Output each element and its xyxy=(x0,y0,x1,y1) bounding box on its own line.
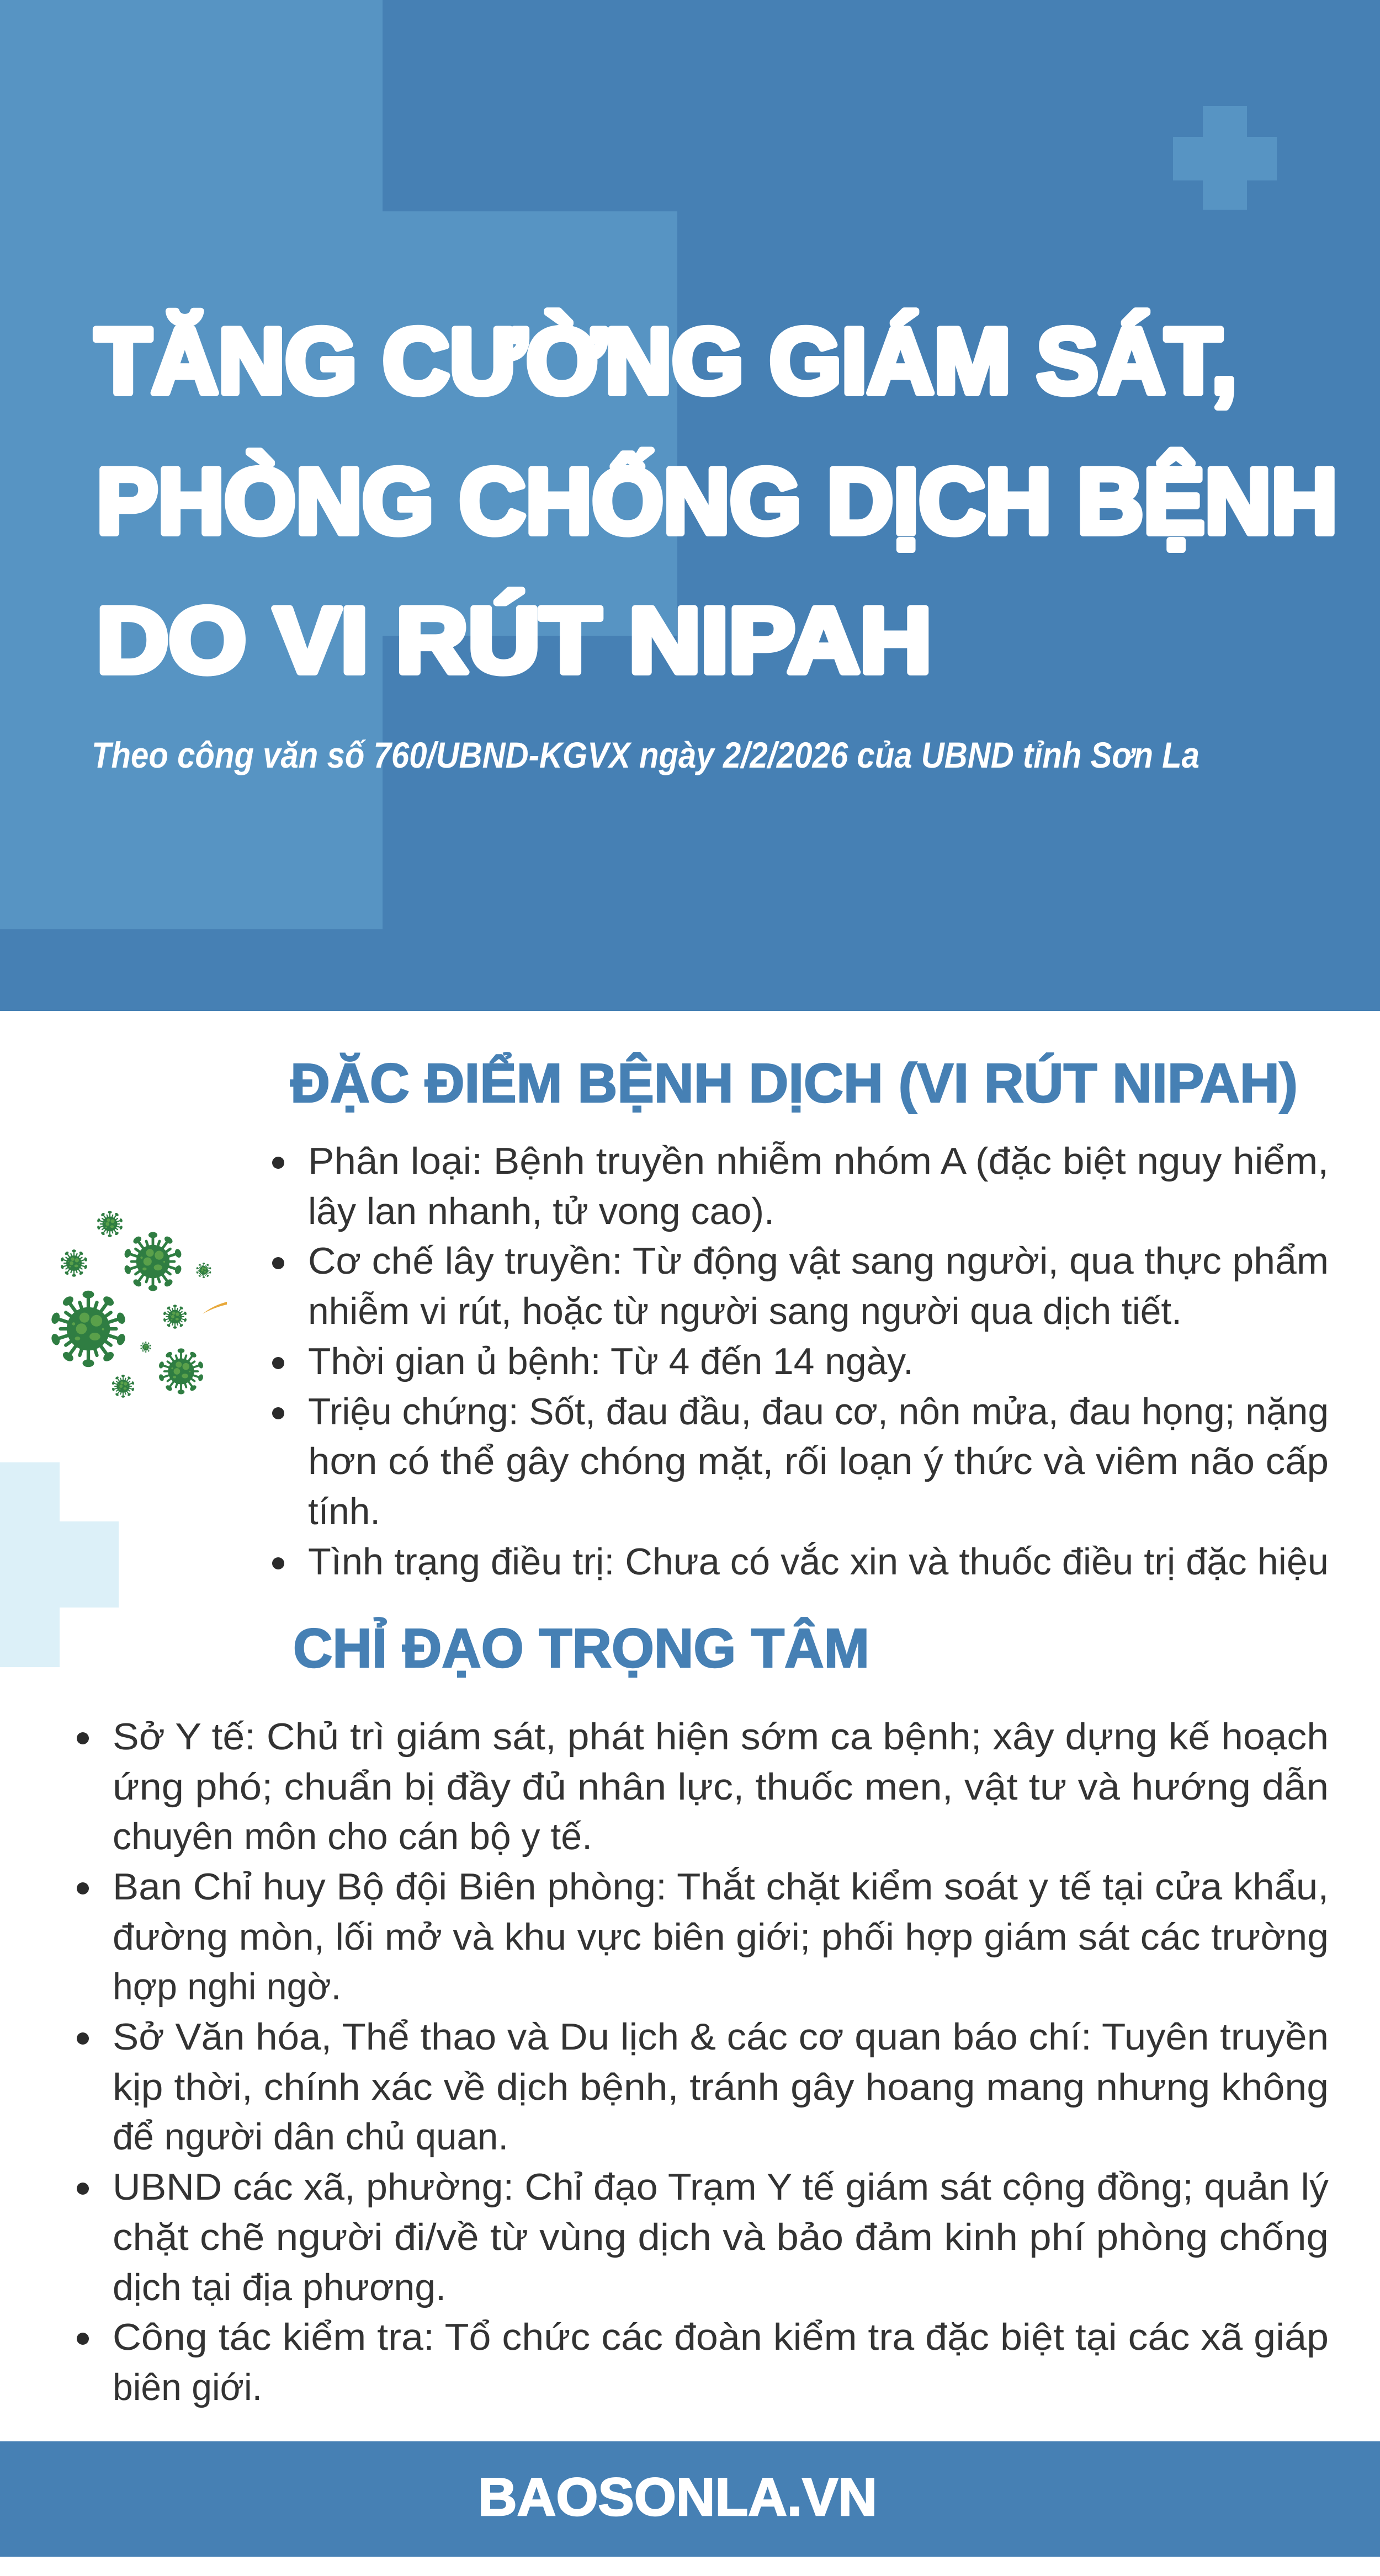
bullet list: key directions: dịch tại địa phương. xyxy=(113,2266,446,2308)
large background cross xyxy=(0,0,677,929)
panel: disease characteristics xyxy=(272,1052,1329,1583)
bullet list: disease characteristics: Phân loại: Bệnh truyền nhiễm nhóm A (đặc biệt nguy hiểm, xyxy=(308,1140,1329,1182)
bullet list: key directions: chuyên môn cho cán bộ y tế. xyxy=(113,1816,592,1858)
bullet list: key directions xyxy=(77,1716,1329,2408)
title: TĂNG CƯỜNG GIÁM SÁT, xyxy=(95,309,1237,413)
icon: virus cluster xyxy=(49,1211,227,1398)
bullet list: key directions: chặt chẽ người đi/về từ vùng dịch và bảo đảm kinh phí phòng chống xyxy=(113,2216,1329,2258)
bullet list: key directions: để người dân chủ quan. xyxy=(113,2116,508,2158)
heading: disease characteristics: ĐẶC ĐIỂM BỆNH DỊCH (VI RÚT NIPAH) xyxy=(290,1052,1298,1114)
title xyxy=(95,309,1337,692)
bullet list: key directions: đường mòn, lối mở và khu vực biên giới; phối hợp giám sát các trường xyxy=(113,1916,1329,1958)
footer text: BAOSONLA.VN xyxy=(478,2467,877,2527)
bullet list: key directions: Ban Chỉ huy Bộ đội Biên phòng: Thắt chặt kiểm soát y tế tại cửa khẩu, xyxy=(113,1866,1329,1908)
bullet list: disease characteristics: Triệu chứng: Sốt, đau đầu, đau cơ, nôn mửa, đau họng; nặng xyxy=(308,1391,1329,1433)
bullet list: key directions: ứng phó; chuẩn bị đầy đủ nhân lực, thuốc men, vật tư và hướng dẫn xyxy=(113,1766,1329,1808)
bullet list: disease characteristics: Cơ chế lây truyền: Từ động vật sang người, qua thực phẩm xyxy=(308,1240,1329,1282)
title: DO VI RÚT NIPAH xyxy=(97,588,932,692)
bullet list: disease characteristics xyxy=(272,1140,1329,1583)
bullet list: key directions: UBND các xã, phường: Chỉ đạo Trạm Y tế giám sát cộng đồng; quản lý xyxy=(113,2166,1329,2208)
panel: header xyxy=(0,0,1380,1011)
bullet list: key directions: hợp nghi ngờ. xyxy=(113,1966,341,2008)
subtitle: Theo công văn số 760/UBND-KGVX ngày 2/2/2026 của UBND tỉnh Sơn La xyxy=(92,735,1199,775)
bullet list: disease characteristics: Thời gian ủ bệnh: Từ 4 đến 14 ngày. xyxy=(308,1340,914,1382)
bullet list: key directions: kịp thời, chính xác về dịch bệnh, tránh gây hoang mang nhưng không xyxy=(113,2066,1329,2108)
bullet list: disease characteristics: tính. xyxy=(308,1491,380,1532)
bullet list: disease characteristics: Tình trạng điều trị: Chưa có vắc xin và thuốc điều trị đặc hiệu xyxy=(308,1541,1329,1583)
icon: small cross xyxy=(1173,106,1277,210)
bullet list: key directions: biên giới. xyxy=(113,2366,262,2408)
bullet list: key directions: Sở Y tế: Chủ trì giám sát, phát hiện sớm ca bệnh; xây dựng kế hoạch xyxy=(113,1716,1329,1758)
title: PHÒNG CHỐNG DỊCH BỆNH xyxy=(97,449,1337,553)
bullet list: disease characteristics: hơn có thể gây chóng mặt, rối loạn ý thức và viêm não cấp xyxy=(308,1440,1329,1482)
bullet list: key directions: Công tác kiểm tra: Tổ chức các đoàn kiểm tra đặc biệt tại các xã giáp xyxy=(113,2316,1329,2358)
decorative pale cross xyxy=(0,1462,119,1667)
bullet list: disease characteristics: lây lan nhanh, tử vong cao). xyxy=(308,1190,774,1232)
heading: key directions: CHỈ ĐẠO TRỌNG TÂM xyxy=(293,1617,869,1679)
bullet list: disease characteristics: nhiễm vi rút, hoặc từ người sang người qua dịch tiết. xyxy=(308,1290,1182,1332)
bullet list: key directions: Sở Văn hóa, Thể thao và Du lịch & các cơ quan báo chí: Tuyên truyền xyxy=(113,2016,1329,2058)
footer band xyxy=(0,2441,1380,2557)
panel: key directions xyxy=(77,1617,1329,2408)
